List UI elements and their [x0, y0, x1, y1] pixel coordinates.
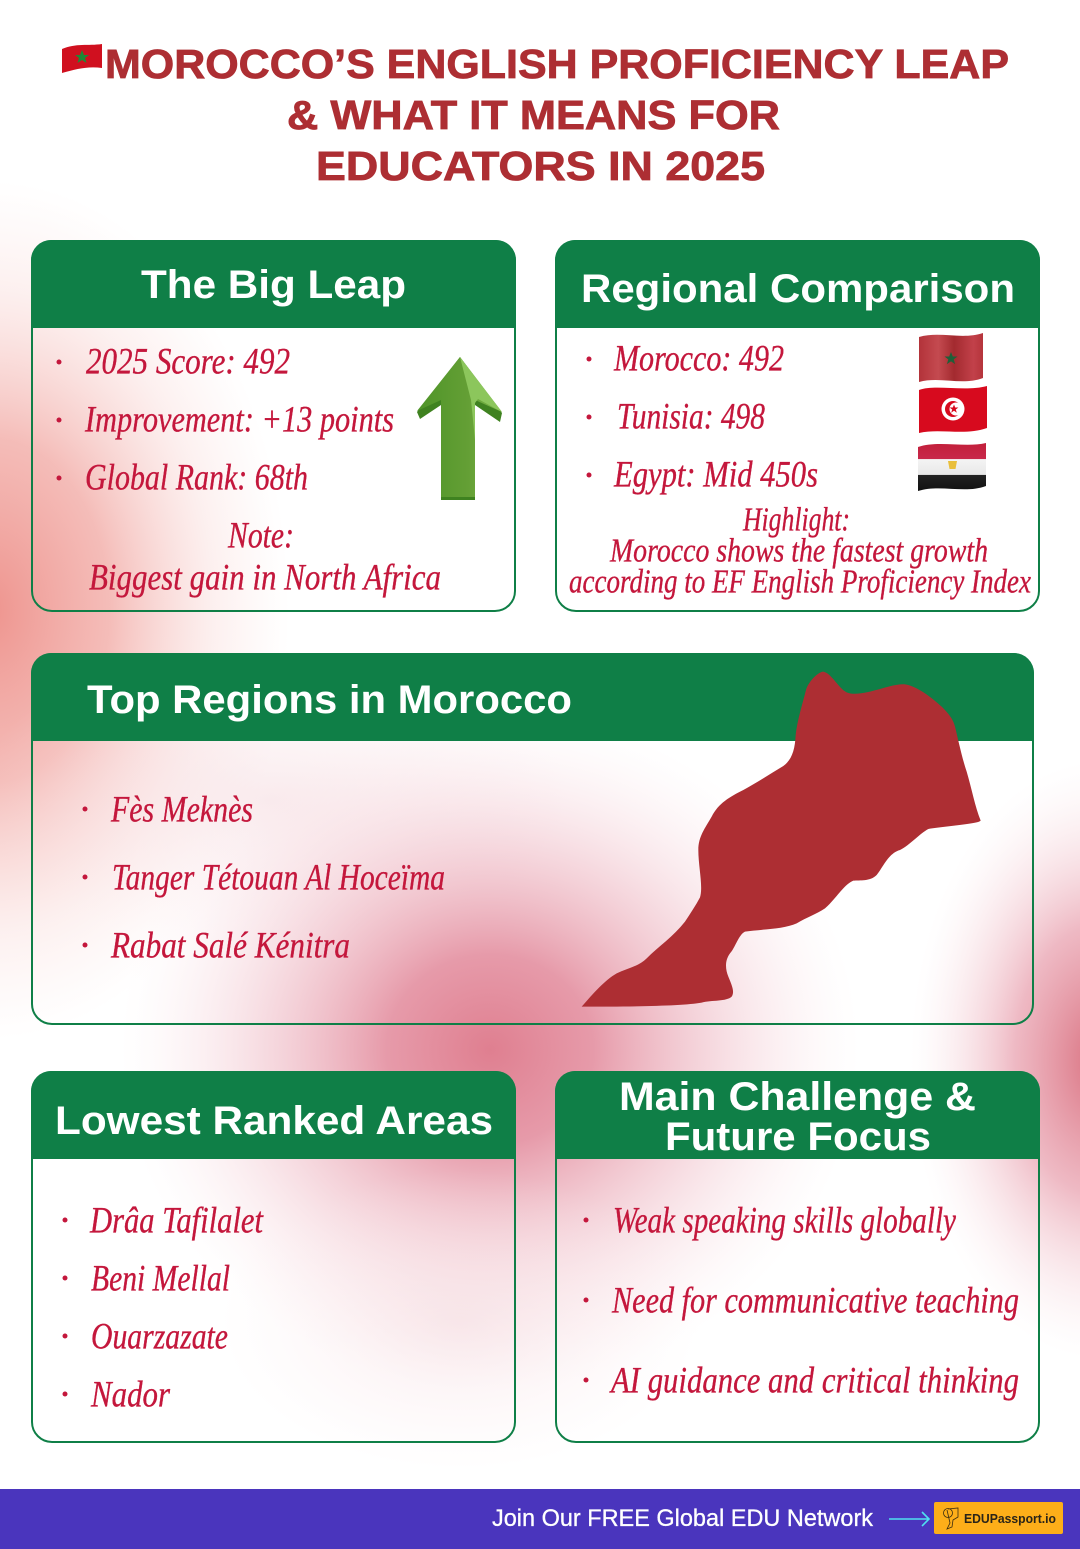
title: MOROCCO’S ENGLISH PROFICIENCY LEAP	[105, 41, 1009, 87]
panel: Top Regions in Morocco: Fès Meknès	[110, 790, 253, 830]
panel: The Big Leap: Global Rank: 68th	[85, 458, 308, 498]
panel: Lowest Ranked Areas: Drâa Tafilalet	[89, 1200, 264, 1242]
panel: The Big Leap: Biggest gain in North Africa	[89, 558, 441, 598]
icon: Tunisia flag	[919, 386, 987, 433]
panel: Regional Comparison	[555, 240, 1040, 611]
icon: Egypt flag	[918, 443, 986, 491]
panel: Regional Comparison: Egypt: Mid 450s	[613, 454, 818, 496]
panel header: Main Challenge and Future Focus: Future Focus	[665, 1115, 931, 1159]
footer banner: Join Our FREE Global EDU Network	[492, 1505, 874, 1532]
panel: Top Regions in Morocco: Rabat Salé Kénitra	[110, 926, 350, 966]
panel: Top Regions in Morocco	[31, 653, 1034, 1024]
panel: The Big Leap	[31, 240, 516, 611]
panel: Regional Comparison: Morocco: 492	[613, 338, 784, 380]
panel header: Regional Comparison	[555, 240, 1040, 328]
panel: Lowest Ranked Areas: Nador	[90, 1374, 171, 1416]
panel: Lowest Ranked Areas: Beni Mellal	[91, 1258, 230, 1300]
footer banner	[0, 1489, 1080, 1549]
panel: Lowest Ranked Areas	[31, 1071, 516, 1442]
panel: The Big Leap: Improvement: +13 points	[84, 400, 394, 440]
panel header: Regional Comparison: Regional Comparison	[581, 267, 1015, 311]
icon: Morocco flag	[919, 333, 983, 382]
arrow to logo	[889, 1512, 929, 1526]
title: EDUCATORS IN 2025	[316, 143, 765, 189]
map of Morocco	[582, 672, 981, 1007]
panel header: The Big Leap	[31, 240, 516, 328]
panel: Regional Comparison: Tunisia: 498	[617, 396, 765, 438]
panel: Main Challenge and Future Focus: Weak speaking skills globally	[613, 1200, 956, 1242]
panel header: Main Challenge and Future Focus: Main Challenge &	[619, 1075, 976, 1119]
logo badge: EDUPassport.io	[934, 1502, 1063, 1534]
panel header: Top Regions in Morocco: Top Regions in Morocco	[87, 678, 572, 722]
panel: Regional Comparison: Highlight:	[742, 502, 850, 538]
title: & WHAT IT MEANS FOR	[287, 92, 780, 138]
panel header: Lowest Ranked Areas: Lowest Ranked Areas	[55, 1099, 493, 1143]
logo badge: EDUPassport.io: EDUPassport.io	[964, 1511, 1056, 1526]
icon: Morocco flag in title	[62, 44, 102, 73]
panel header: Lowest Ranked Areas	[31, 1071, 516, 1159]
panel header: Main Challenge and Future Focus	[555, 1071, 1040, 1159]
panel: The Big Leap: 2025 Score: 492	[86, 342, 290, 382]
title	[62, 41, 1009, 189]
panel: The Big Leap: Note:	[227, 516, 294, 556]
panel header: Top Regions in Morocco	[31, 653, 1034, 741]
icon: green up arrow	[417, 357, 502, 500]
panel header: The Big Leap: The Big Leap	[141, 263, 406, 307]
panel: Main Challenge and Future Focus	[555, 1071, 1040, 1442]
panel: Regional Comparison: Morocco shows the fastest growth	[609, 532, 988, 570]
panel: Lowest Ranked Areas: Ouarzazate	[91, 1316, 228, 1358]
panel: Top Regions in Morocco: Tanger Tétouan Al Hoceïma	[112, 858, 445, 898]
